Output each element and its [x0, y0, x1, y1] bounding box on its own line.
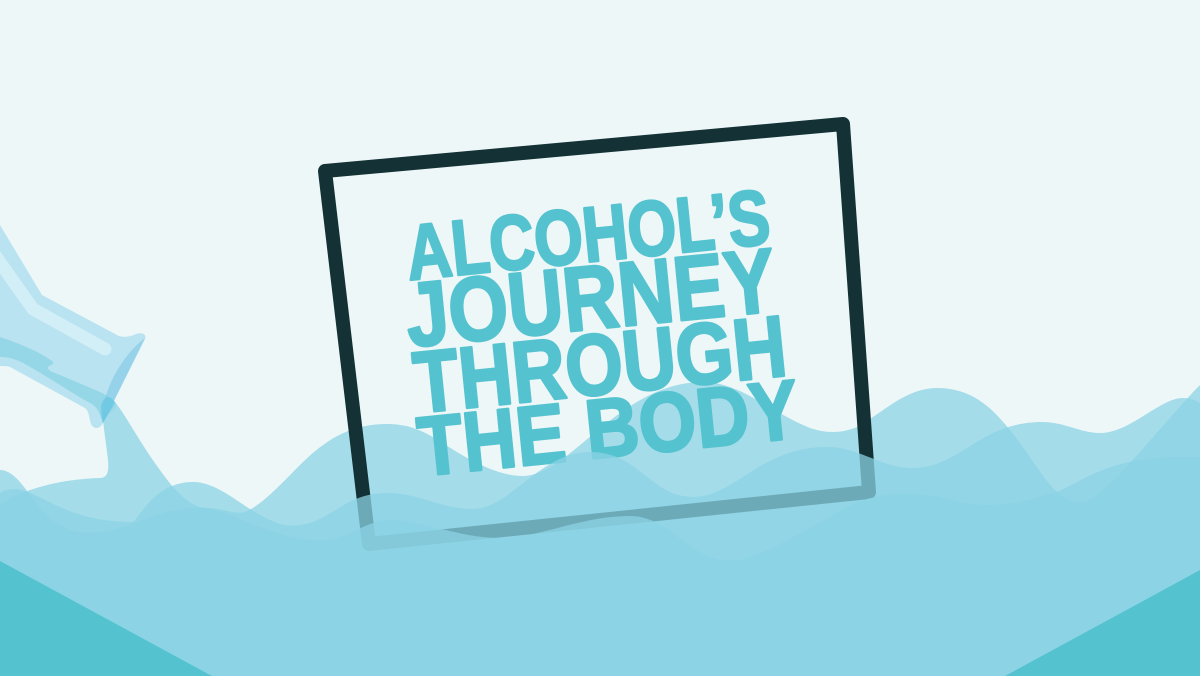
- picture frame: [325, 124, 869, 544]
- corner triangle: right: [1005, 570, 1200, 676]
- icon: tilted bottle pouring: [0, 225, 145, 428]
- title: JOURNEY: [401, 230, 780, 367]
- middle wave: [0, 398, 1200, 676]
- title: [401, 172, 803, 494]
- front wave: [0, 457, 1200, 676]
- title: THROUGH: [409, 298, 791, 432]
- title: THE BODY: [413, 362, 803, 494]
- corner triangle: left: [0, 561, 212, 676]
- title: ALCOHOL’S: [402, 172, 774, 297]
- back wave with poured stream: [0, 382, 1200, 676]
